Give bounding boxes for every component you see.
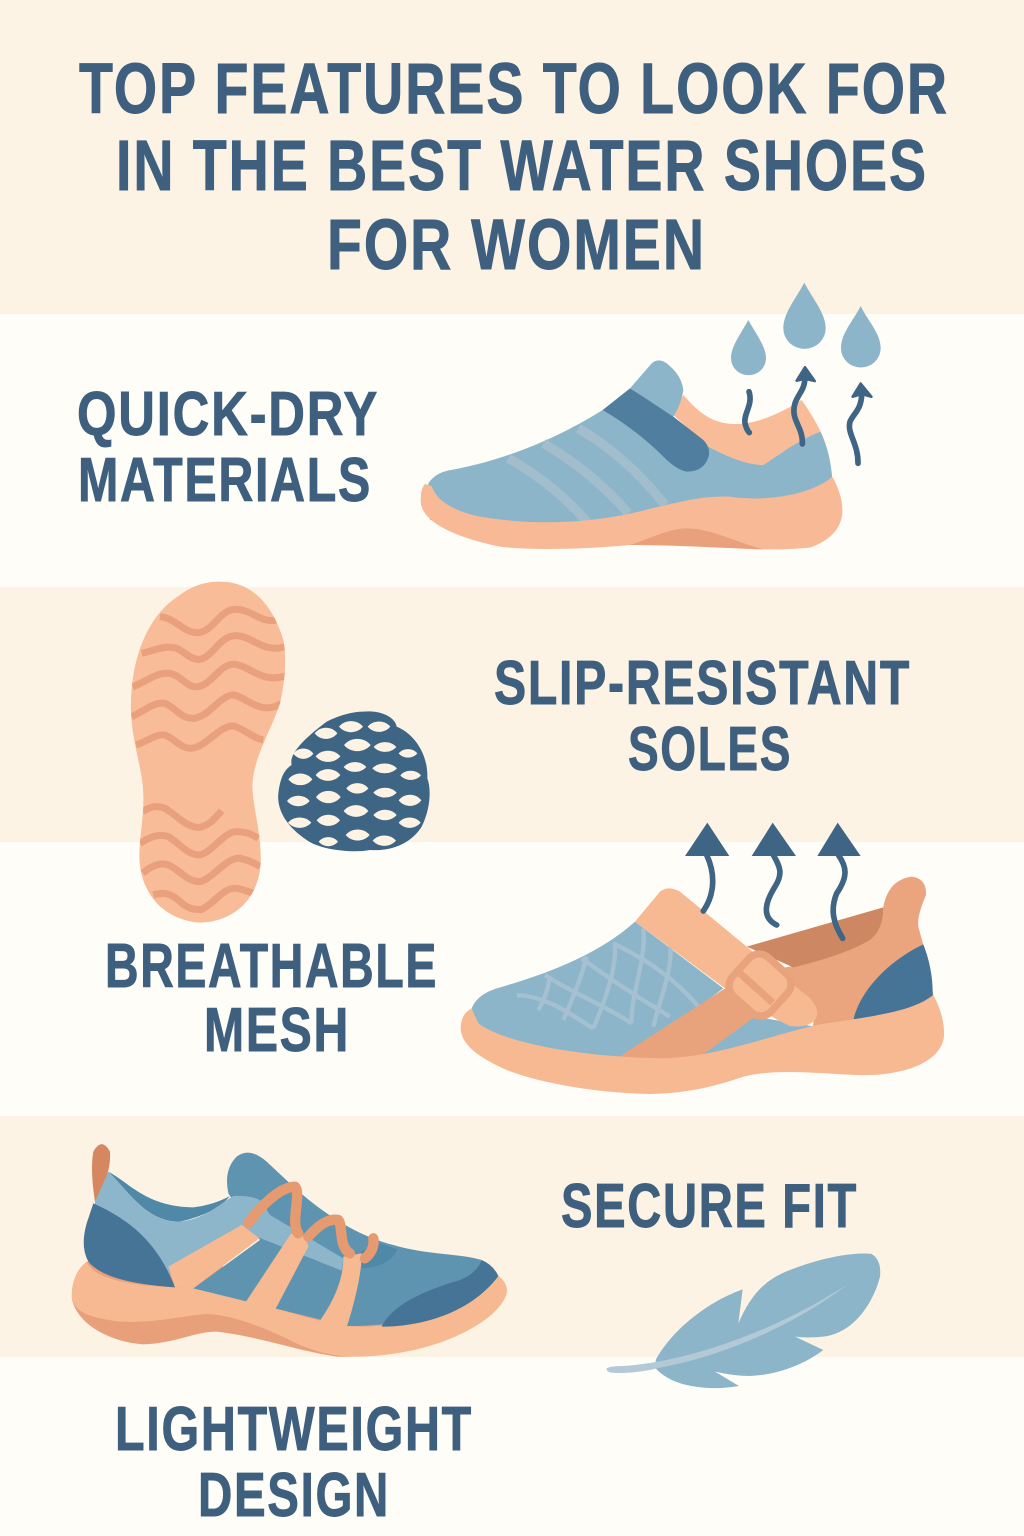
- strap: [635, 888, 817, 1027]
- toe cap: [382, 1260, 498, 1327]
- illustration: quick-dry shoe with drops: [421, 283, 881, 549]
- sole base shadow: [72, 1262, 507, 1357]
- upper body and tongue: [193, 1153, 498, 1326]
- small blue panel: [703, 1017, 812, 1060]
- tread waves: [132, 609, 286, 909]
- heading: slip-resistant soles: [494, 649, 911, 784]
- inner collar: [747, 907, 883, 967]
- heading: slip-resistant soles: SOLES: [628, 715, 792, 784]
- heading: quick-dry materials: MATERIALS: [78, 446, 372, 515]
- heading: quick-dry materials: QUICK-DRY: [77, 380, 379, 449]
- sole: [72, 1262, 507, 1357]
- mesh pattern: [517, 928, 698, 1028]
- heading: breathable mesh: [105, 932, 438, 1065]
- water drops: [731, 283, 881, 375]
- heading: breathable mesh: MESH: [204, 996, 350, 1065]
- tongue shadow: [362, 1243, 397, 1268]
- shoe sole: [421, 477, 842, 549]
- sole arch shadow: [630, 528, 763, 549]
- icon: mesh swatch: [278, 711, 430, 851]
- pull tab: [92, 1144, 110, 1202]
- heading: secure fit: SECURE FIT: [561, 1172, 858, 1241]
- shoe strap: [603, 388, 709, 472]
- shoe tongue: [630, 360, 683, 417]
- heel counter: [853, 944, 933, 1020]
- heading: quick-dry materials: [77, 380, 379, 515]
- feather quill: [607, 1285, 847, 1373]
- icon: feather: [607, 1253, 880, 1388]
- blue upper: [472, 922, 723, 1067]
- illustration: shoe sole tread: [131, 582, 286, 923]
- laces: [248, 1187, 374, 1258]
- heading: lightweight design: [115, 1395, 473, 1530]
- shoe upper: [428, 410, 832, 540]
- airflow arrows: [703, 855, 845, 938]
- heading: breathable mesh: BREATHABLE: [105, 932, 438, 1001]
- collar lining: [108, 1172, 230, 1222]
- heading: lightweight design: LIGHTWEIGHT: [115, 1395, 473, 1464]
- light collar band: [93, 1172, 343, 1277]
- shoe collar: [673, 395, 821, 465]
- buckle: [723, 948, 797, 1022]
- heading: slip-resistant soles: SLIP-RESISTANT: [494, 649, 911, 718]
- heading: lightweight design: DESIGN: [198, 1461, 390, 1530]
- title: FOR WOMEN: [327, 206, 706, 285]
- straps: [168, 1225, 362, 1327]
- heel counter: [84, 1203, 175, 1287]
- illustration: breathable mesh shoe with arrows: [461, 823, 944, 1094]
- sole: [461, 995, 944, 1094]
- title: [79, 50, 949, 285]
- vapour arrows: [745, 377, 862, 463]
- heel panel: [770, 877, 933, 1037]
- lower side panel: [618, 988, 757, 1063]
- shoe stripes: [508, 428, 665, 523]
- illustration: secure fit shoe: [72, 1144, 507, 1357]
